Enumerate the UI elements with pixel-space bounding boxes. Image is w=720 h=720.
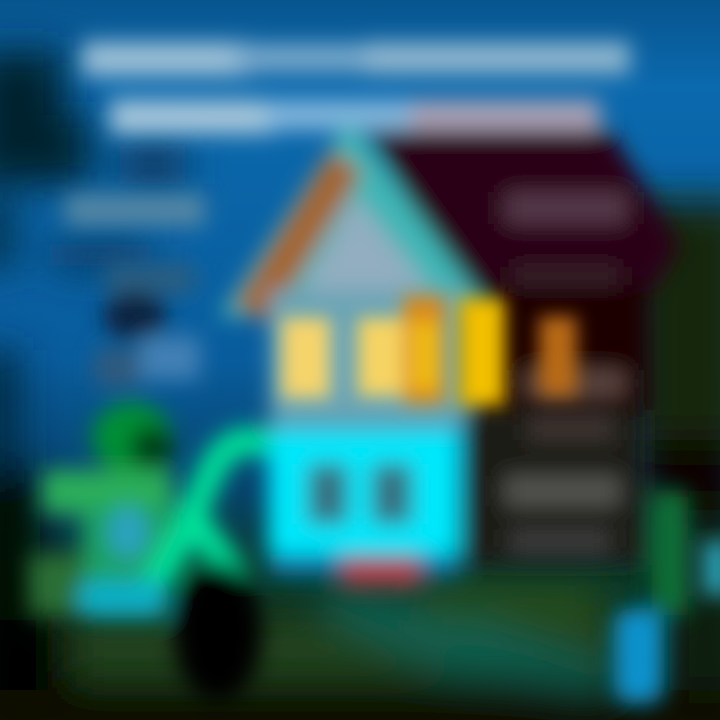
dark tree right xyxy=(630,200,720,720)
right captions xyxy=(505,192,627,552)
blue bottle xyxy=(614,490,720,704)
caption left top xyxy=(65,194,205,226)
green ribbon icon xyxy=(148,441,258,592)
house wall xyxy=(270,290,466,425)
house base xyxy=(270,540,460,576)
cyan lower storey xyxy=(268,428,460,554)
cyan base xyxy=(78,580,168,618)
porch step xyxy=(342,558,420,586)
house dark side wall xyxy=(465,285,650,415)
dark figure xyxy=(174,562,262,702)
green plant xyxy=(30,402,174,615)
lit windows xyxy=(282,296,577,406)
lower storey windows xyxy=(308,464,412,524)
rafter stripe xyxy=(234,150,362,322)
dark tree left xyxy=(0,50,185,490)
left foreground darkness xyxy=(0,470,40,720)
title xyxy=(82,42,630,134)
ground xyxy=(0,585,720,720)
house dark roof xyxy=(368,130,680,305)
caption left middle xyxy=(95,264,200,386)
house front gable xyxy=(218,120,484,322)
